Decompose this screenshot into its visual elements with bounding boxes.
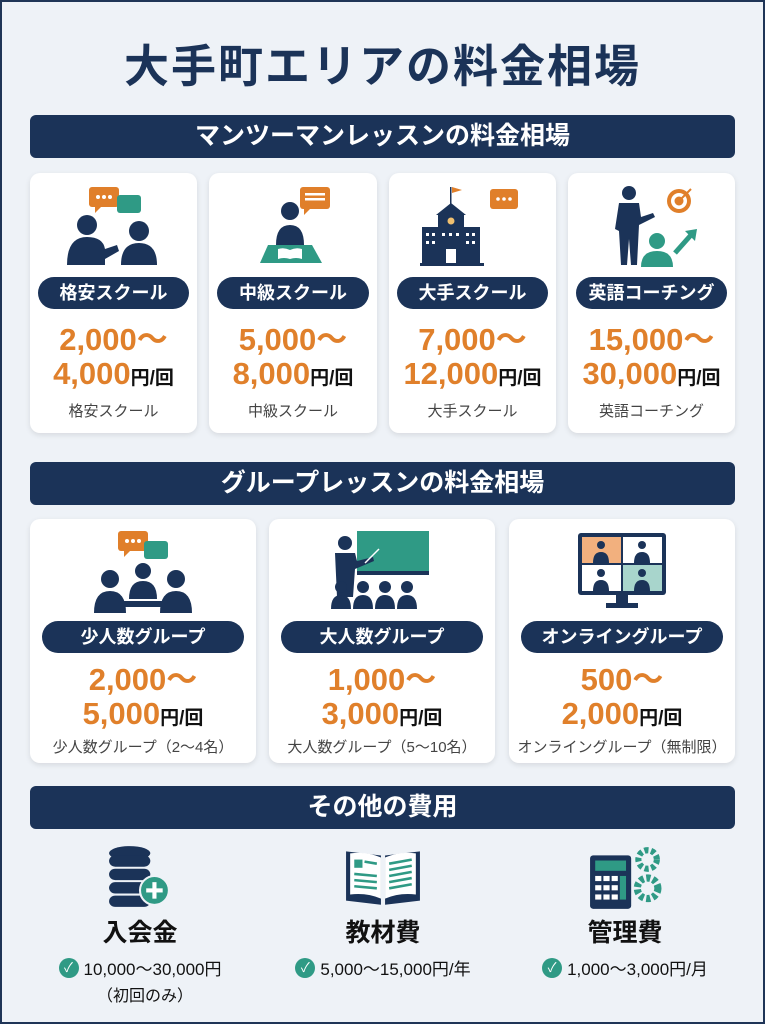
pill label: 少人数グループ: [81, 627, 205, 647]
price: [322, 662, 442, 731]
section bar: man-to-man: [30, 115, 735, 158]
price: [403, 322, 542, 391]
pill label: [42, 621, 244, 653]
icon: school building: [420, 187, 518, 266]
subtitle: 大人数グループ（5～10名）: [287, 739, 477, 756]
price: 2,000～: [59, 322, 168, 357]
section bar: group: グループレッスンの料金相場: [221, 469, 544, 497]
price: [582, 322, 721, 391]
card: 大手スクール: [389, 173, 556, 433]
price: 2,000円/回: [562, 696, 682, 731]
pill label: [281, 621, 483, 653]
price: [562, 662, 682, 731]
icon: classroom: [331, 531, 429, 609]
amount: ✓: [64, 960, 73, 974]
section bar: man-to-man: マンツーマンレッスンの料金相場: [195, 122, 570, 150]
price: 12,000円/回: [403, 356, 542, 391]
icon: open book: [346, 851, 420, 905]
price: 30,000円/回: [582, 356, 721, 391]
fee: 管理費: [542, 847, 708, 979]
amount: 5,000～15,000円/年: [320, 960, 471, 979]
subtitle: オンライングループ（無制限）: [517, 739, 727, 756]
pill label: 中級スクール: [239, 283, 347, 303]
icon: coach with target: [615, 186, 697, 267]
amount: 10,000～30,000円: [84, 960, 222, 979]
price: 15,000～: [589, 322, 714, 357]
price: 7,000～: [418, 322, 527, 357]
pill label: 大人数グループ: [320, 627, 444, 647]
price: 5,000～: [239, 322, 347, 357]
icon: small group: [94, 531, 192, 613]
card: 格安スクール: [30, 173, 197, 433]
pill label: [521, 621, 723, 653]
price: 500～: [581, 662, 663, 697]
section bar: group: [30, 462, 735, 505]
price: [53, 322, 174, 391]
icon: calculator gears: [590, 847, 662, 909]
subtitle: 少人数グループ（2～4名）: [53, 739, 233, 756]
price: 1,000～: [328, 662, 436, 697]
card: 大人数グループ: [269, 519, 495, 763]
price: 5,000円/回: [83, 696, 203, 731]
amount: 1,000～3,000円/月: [567, 960, 708, 979]
pill label: 大手スクール: [418, 283, 526, 303]
icon: video call monitor: [578, 533, 666, 608]
pill label: [397, 277, 548, 309]
icon: teacher at desk: [260, 187, 330, 263]
pill label: 英語コーチング: [588, 283, 714, 303]
amount: ✓: [548, 960, 557, 974]
price: 8,000円/回: [233, 356, 353, 391]
pill label: [576, 277, 727, 309]
card: オンライングループ: [509, 519, 735, 763]
pill label: オンライングループ: [542, 627, 702, 647]
price: 2,000～: [89, 662, 197, 697]
amount: ✓: [301, 960, 310, 974]
icon: coins plus: [109, 846, 168, 907]
section bar: other costs: [30, 786, 735, 829]
subtitle: 大手スクール: [427, 403, 518, 420]
heading: 管理費: [587, 919, 662, 947]
pill label: [217, 277, 369, 309]
price: [233, 322, 353, 391]
heading: 教材費: [345, 919, 420, 947]
title: 大手町エリアの料金相場: [124, 41, 641, 92]
fee: 入会金: [59, 846, 222, 1005]
fee: 教材費: [295, 851, 471, 979]
subtitle: 格安スクール: [68, 403, 158, 420]
subtitle: 中級スクール: [248, 403, 338, 420]
card: 少人数グループ: [30, 519, 256, 763]
pill label: 格安スクール: [60, 283, 168, 303]
price: 3,000円/回: [322, 696, 442, 731]
icon: two people talking: [67, 187, 157, 265]
pill label: [38, 277, 189, 309]
price: 4,000円/回: [53, 356, 174, 391]
note: （初回のみ）: [97, 988, 193, 1005]
price: [83, 662, 203, 731]
card: 英語コーチング: [568, 173, 735, 433]
section bar: other costs: その他の費用: [307, 793, 458, 821]
subtitle: 英語コーチング: [599, 403, 704, 420]
heading: 入会金: [102, 919, 178, 947]
card: 中級スクール: [209, 173, 377, 433]
